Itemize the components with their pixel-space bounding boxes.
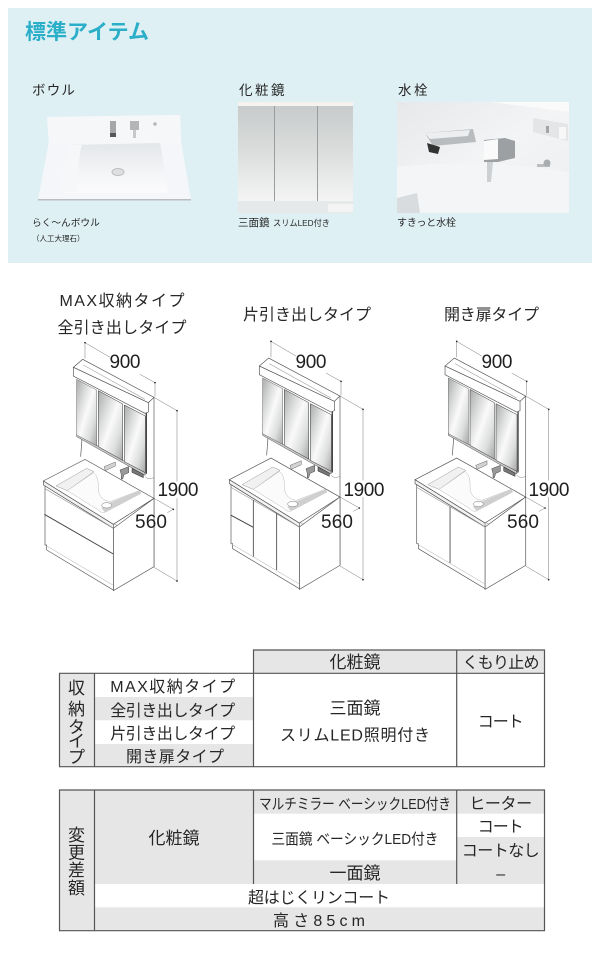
- diagram: single drawer vanity: 560: [321, 512, 353, 533]
- row labels: 片引き出しタイプ: [110, 725, 235, 743]
- icon: faucet photo: [397, 102, 569, 213]
- row: super repellent coating: 超はじくリンコート: [248, 889, 390, 907]
- cells: heater and coating: コートなし: [462, 842, 540, 860]
- table: price options: [60, 790, 544, 931]
- vertical label: storage type: タ: [68, 718, 85, 737]
- title: 標準アイテム: [25, 21, 149, 44]
- vertical label: price difference: 差: [68, 861, 85, 880]
- cell: mirror specification: 三面鏡: [330, 699, 380, 718]
- heading: MAX and full drawer types: MAX収納タイプ: [60, 292, 184, 310]
- heading: hinged door type: 開き扉タイプ: [444, 306, 539, 324]
- cell: mirror option: 化粧鏡: [148, 829, 200, 848]
- item: bowl: ボウル: [32, 83, 76, 98]
- diagram: hinged door vanity: 1900: [528, 480, 570, 501]
- cells: mirror variations: 一面鏡: [330, 864, 380, 883]
- row labels: MAX収納タイプ: [110, 678, 235, 696]
- vertical label: storage type: 収: [68, 679, 85, 698]
- header: anti-fog: くもり止め: [462, 654, 540, 672]
- vertical label: storage type: プ: [68, 748, 85, 767]
- diagram: hinged door vanity: [415, 341, 570, 589]
- item: mirror: [238, 83, 353, 229]
- diagram: single drawer vanity: 1900: [344, 480, 384, 501]
- icon: mirror photo: [238, 102, 353, 213]
- cells: heater and coating: –: [496, 866, 505, 883]
- item: bowl: らく〜んボウル: [32, 217, 100, 229]
- item: faucet: すきっと水栓: [397, 216, 456, 229]
- vertical label: storage type: 納: [68, 700, 85, 719]
- cells: heater and coating: コート: [478, 819, 524, 836]
- item: mirror: 化粧鏡: [239, 83, 287, 98]
- cell: coating: コート: [478, 714, 524, 731]
- diagram: MAX storage vanity: 560: [135, 512, 167, 533]
- cells: mirror variations: 三面鏡 ベーシックLED付き: [272, 831, 438, 848]
- vertical label: price difference: 更: [68, 844, 85, 862]
- icon: bowl photo: [38, 115, 191, 200]
- diagram: MAX storage vanity: [43, 342, 199, 591]
- row labels: 開き扉タイプ: [126, 748, 224, 766]
- item: mirror: 三面鏡: [238, 216, 270, 229]
- diagram: hinged door vanity: 560: [507, 512, 539, 533]
- vertical label: price difference: 額: [68, 879, 85, 898]
- item: bowl: （人工大理石）: [32, 233, 84, 243]
- item: bowl: [32, 83, 191, 243]
- cell: mirror specification: スリムLED照明付き: [280, 726, 430, 744]
- diagram: MAX storage vanity: 900: [110, 352, 140, 373]
- row labels: 全引き出しタイプ: [110, 702, 235, 720]
- diagram: MAX storage vanity: 1900: [158, 480, 198, 501]
- vertical label: storage type: イ: [68, 732, 85, 751]
- heading: MAX and full drawer types: [58, 292, 186, 337]
- diagram: single drawer vanity: [229, 341, 384, 589]
- panel: standard items: [8, 8, 592, 263]
- diagram: hinged door vanity: 900: [482, 352, 512, 373]
- item: faucet: 水栓: [398, 83, 430, 98]
- table: storage types: [60, 650, 544, 767]
- cells: heater and coating: ヒーター: [469, 795, 532, 813]
- cells: heater and coating: [462, 795, 540, 883]
- item: faucet: [397, 83, 569, 229]
- vertical label: price difference: 変: [68, 826, 85, 845]
- cells: mirror variations: マルチミラー ベーシックLED付き: [259, 796, 451, 813]
- diagram: single drawer vanity: 900: [296, 352, 326, 373]
- cells: mirror variations: [259, 796, 451, 883]
- cell: mirror specification: [280, 699, 430, 744]
- row labels: [110, 678, 235, 766]
- heading: MAX and full drawer types: 全引き出しタイプ: [58, 319, 186, 337]
- row: height 85cm: 高さ85cm: [273, 912, 365, 930]
- header: mirror: 化粧鏡: [330, 653, 380, 672]
- heading: single drawer type: 片引き出しタイプ: [243, 306, 371, 324]
- item: mirror: スリムLED付き: [273, 218, 330, 228]
